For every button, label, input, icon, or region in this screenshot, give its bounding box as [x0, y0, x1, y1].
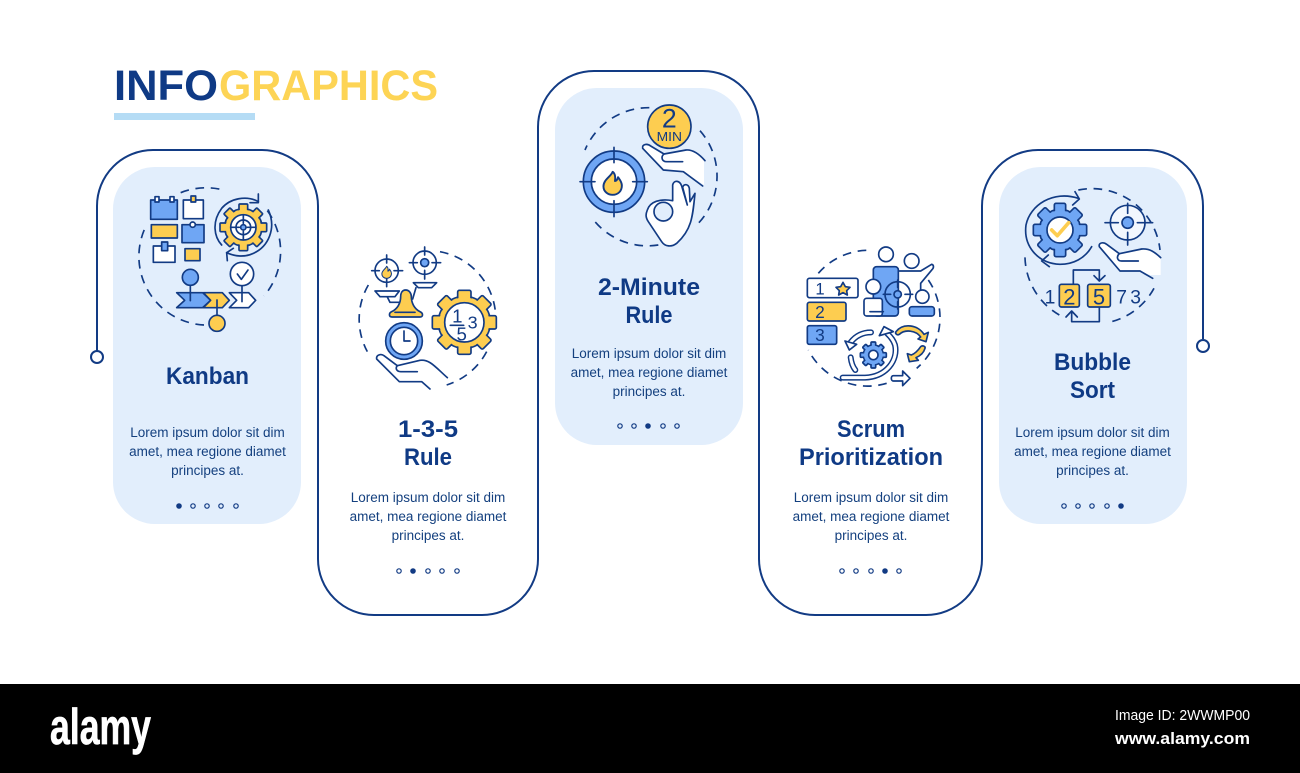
- icon: bubble sort: 1: [1045, 287, 1055, 308]
- text block: principes at.: [835, 528, 907, 543]
- panel: Scrum Prioritization: [793, 247, 950, 573]
- text block: amet, mea regione diamet: [571, 365, 728, 380]
- heading: Prioritization: [799, 444, 943, 471]
- heading: 1-3-5: [398, 416, 458, 443]
- text block: Lorem ipsum dolor sit dim: [794, 490, 948, 505]
- icon: 1-3-5 rule: [359, 247, 496, 389]
- pagination dots: [1062, 504, 1123, 508]
- text block: principes at.: [392, 528, 464, 543]
- heading: Kanban: [166, 363, 249, 390]
- icon: scrum prioritization: [807, 247, 940, 386]
- heading: Scrum: [837, 416, 905, 443]
- icon: bubble sort: 2: [1063, 284, 1075, 309]
- icon: 1-3-5 rule: 5: [456, 324, 467, 345]
- panel backgrounds outline connector: [91, 71, 1209, 615]
- heading: Bubble: [1054, 349, 1131, 376]
- text block: Lorem ipsum dolor sit dim: [1015, 425, 1170, 440]
- icon: two minute rule: 2: [662, 104, 677, 134]
- icon: two minute rule: MIN: [657, 130, 682, 144]
- icon: bubble sort: 7: [1116, 287, 1127, 308]
- website: www.alamy.com: [1114, 729, 1250, 748]
- pagination dots: [397, 569, 459, 573]
- heading: Rule: [626, 302, 672, 329]
- text block: amet, mea regione diamet: [350, 509, 507, 524]
- footer logo: alamy: [50, 699, 151, 755]
- icon: kanban board: [139, 188, 281, 331]
- pagination dots: [177, 504, 238, 508]
- heading: Rule: [404, 444, 452, 471]
- text block: amet, mea regione diamet: [129, 444, 286, 459]
- pagination dots: [840, 569, 901, 573]
- title: INFO: [114, 62, 218, 110]
- title: [114, 62, 438, 120]
- text block: Lorem ipsum dolor sit dim: [572, 346, 726, 361]
- text block: principes at.: [171, 463, 244, 478]
- icon: scrum prioritization: 2: [815, 302, 825, 322]
- icon: two minute rule: [580, 104, 717, 246]
- text block: amet, mea regione diamet: [1014, 444, 1171, 459]
- panel: 1-3-5 Rule: [350, 247, 507, 573]
- title: GRAPHICS: [219, 62, 438, 110]
- icon: bubble sort: 5: [1093, 284, 1105, 309]
- text block: principes at.: [1056, 463, 1129, 478]
- icon: bubble sort: [1025, 189, 1161, 322]
- panel: Kanban: [113, 167, 301, 524]
- panel: Bubble Sort: [999, 167, 1187, 524]
- heading: 2-Minute: [598, 274, 700, 301]
- pagination dots: [618, 424, 679, 428]
- image id: Image ID: 2WWMP00: [1115, 707, 1250, 724]
- icon: 1-3-5 rule: 3: [468, 313, 478, 333]
- icon: scrum prioritization: 3: [815, 325, 825, 345]
- text block: amet, mea regione diamet: [793, 509, 950, 524]
- heading: Sort: [1070, 377, 1115, 404]
- icon: scrum prioritization: 1: [815, 279, 825, 298]
- icon: 1-3-5 rule: 1: [452, 306, 463, 327]
- text block: principes at.: [613, 384, 685, 399]
- icon: bubble sort: 3: [1130, 287, 1141, 308]
- footer band: [0, 684, 1300, 773]
- text block: Lorem ipsum dolor sit dim: [130, 425, 285, 440]
- text block: Lorem ipsum dolor sit dim: [351, 490, 505, 505]
- panel: 2-Minute Rule: [555, 88, 743, 445]
